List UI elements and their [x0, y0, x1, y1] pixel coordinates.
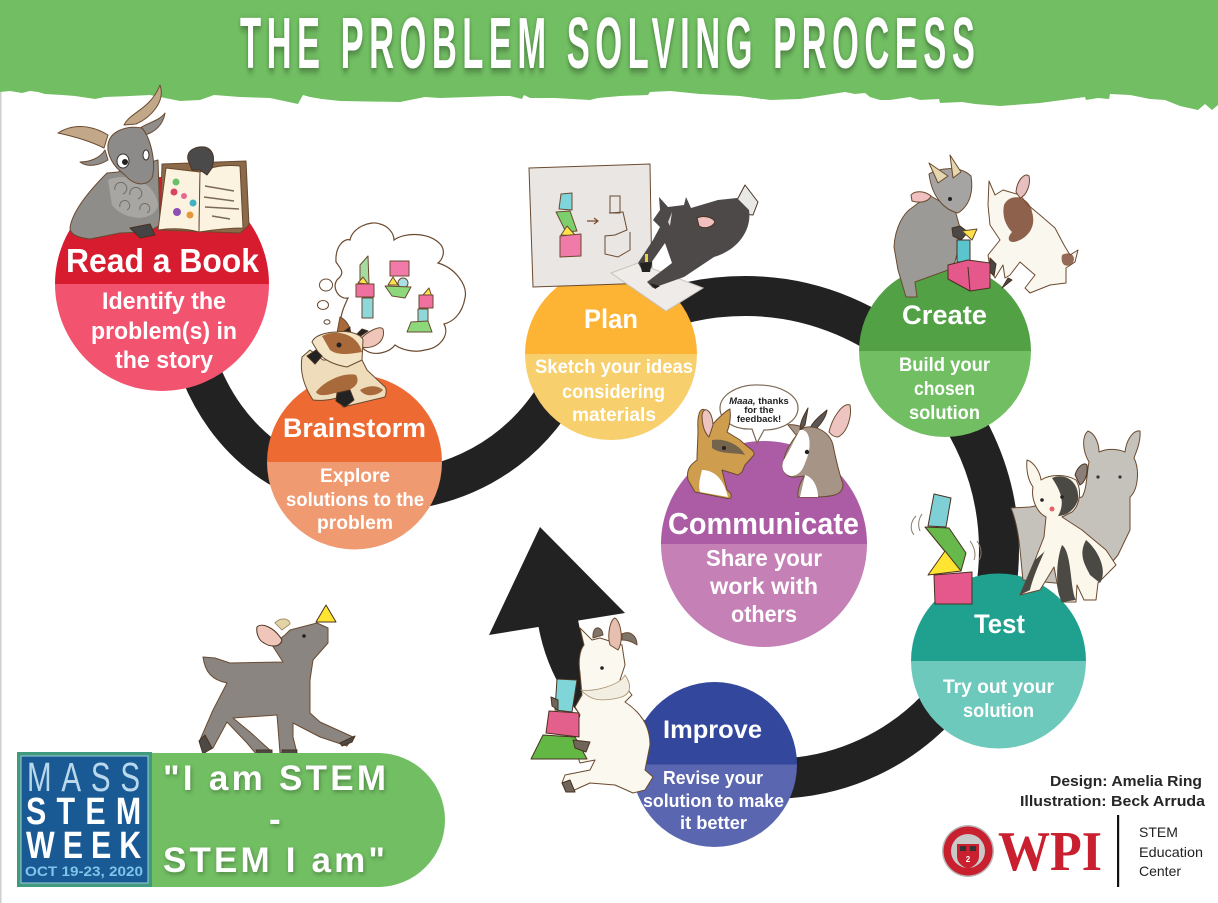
- speech bubble: [720, 385, 798, 443]
- wpi logo: Center: [1139, 863, 1181, 879]
- illustration: test goats: [1011, 431, 1140, 602]
- wpi logo: Education: [1139, 844, 1203, 860]
- slogan pill: STEM I am": [163, 841, 385, 880]
- wpi logo: 2: [966, 855, 971, 864]
- panel: create: Create: [902, 300, 987, 330]
- panel: communicate: Share your: [706, 545, 822, 571]
- speech bubble: feedback!: [737, 414, 781, 425]
- speech bubble: Maaa, thanks: [729, 396, 789, 407]
- wpi logo: STEM: [1139, 824, 1178, 840]
- slogan pill: -: [269, 800, 281, 839]
- panel: plan: [525, 268, 697, 440]
- illustration: drawing sheet: [611, 263, 703, 311]
- illustration: brainstorm goat: [301, 317, 386, 407]
- mass stem week badge: MASS: [27, 754, 140, 800]
- panel: plan: materials: [572, 404, 656, 426]
- illustration: thought cloud and blocks: [318, 223, 465, 353]
- panel: create: [859, 265, 1031, 437]
- illustration: plan goat: [638, 185, 758, 289]
- panel: plan: Plan: [584, 304, 638, 334]
- panel: plan: Sketch your ideas: [535, 356, 693, 378]
- panel: create: Build your: [899, 354, 990, 376]
- panel: improve: Revise your: [663, 768, 763, 788]
- panel: read a book: [55, 177, 269, 391]
- panel: improve: solution to make: [643, 791, 784, 811]
- mass stem week badge: WEEK: [26, 825, 141, 867]
- panel: read a book: problem(s) in: [91, 318, 237, 345]
- title: THE PROBLEM SOLVING PROCESS: [240, 3, 975, 83]
- panel: test: Try out your: [943, 676, 1054, 698]
- slogan pill: "I am STEM: [163, 759, 386, 798]
- credits: Illustration: Beck Arruda: [1020, 793, 1206, 810]
- illustration: walking goat: [199, 605, 355, 756]
- mass stem week badge: OCT 19-23, 2020: [25, 863, 143, 879]
- illustration: wobbling test tower: [911, 494, 981, 604]
- mass stem week badge: [17, 752, 152, 887]
- panel: communicate: others: [731, 601, 797, 627]
- book: [158, 161, 249, 233]
- panel: brainstorm: solutions to the: [286, 489, 424, 511]
- panel: plan: considering: [562, 381, 665, 403]
- credits: [1020, 773, 1206, 810]
- panel: test: [911, 574, 1086, 748]
- panel: brainstorm: problem: [317, 512, 393, 534]
- illustration: create goats: [894, 155, 1078, 297]
- illustration: plan poster: [529, 164, 652, 287]
- panel: brainstorm: Explore: [320, 465, 390, 487]
- panel: brainstorm: [267, 375, 442, 549]
- illustration: goat reading a book: [58, 85, 249, 239]
- panel: communicate: Communicate: [668, 506, 859, 541]
- illustration: communicate goats: [687, 385, 850, 498]
- panel: test: Test: [974, 609, 1025, 639]
- panel: communicate: [661, 441, 867, 647]
- slogan pill: [100, 753, 445, 887]
- panel: create: chosen: [914, 378, 975, 400]
- panel: read a book: Identify the: [102, 288, 226, 315]
- mass stem week badge: STEM: [26, 791, 141, 833]
- wpi logo: WPI: [998, 821, 1102, 883]
- panel: read a book: the story: [115, 347, 214, 374]
- illustration: improve goat: [531, 618, 653, 793]
- header banner with torn edge: [0, 0, 1218, 110]
- arrow head: [489, 527, 625, 635]
- wpi logo: [942, 815, 1203, 887]
- panel: improve: it better: [680, 813, 747, 833]
- credits: Design: Amelia Ring: [1050, 773, 1202, 790]
- panel: communicate: work with: [709, 573, 818, 599]
- panel: improve: Improve: [663, 716, 762, 744]
- panel: improve: [632, 682, 797, 847]
- panel: create: solution: [909, 402, 980, 424]
- panel: read a book: Read a Book: [66, 242, 260, 279]
- panel: test: solution: [963, 700, 1034, 722]
- speech bubble: for the: [744, 405, 774, 416]
- process path ring: [198, 296, 999, 779]
- panel: brainstorm: Brainstorm: [283, 413, 426, 443]
